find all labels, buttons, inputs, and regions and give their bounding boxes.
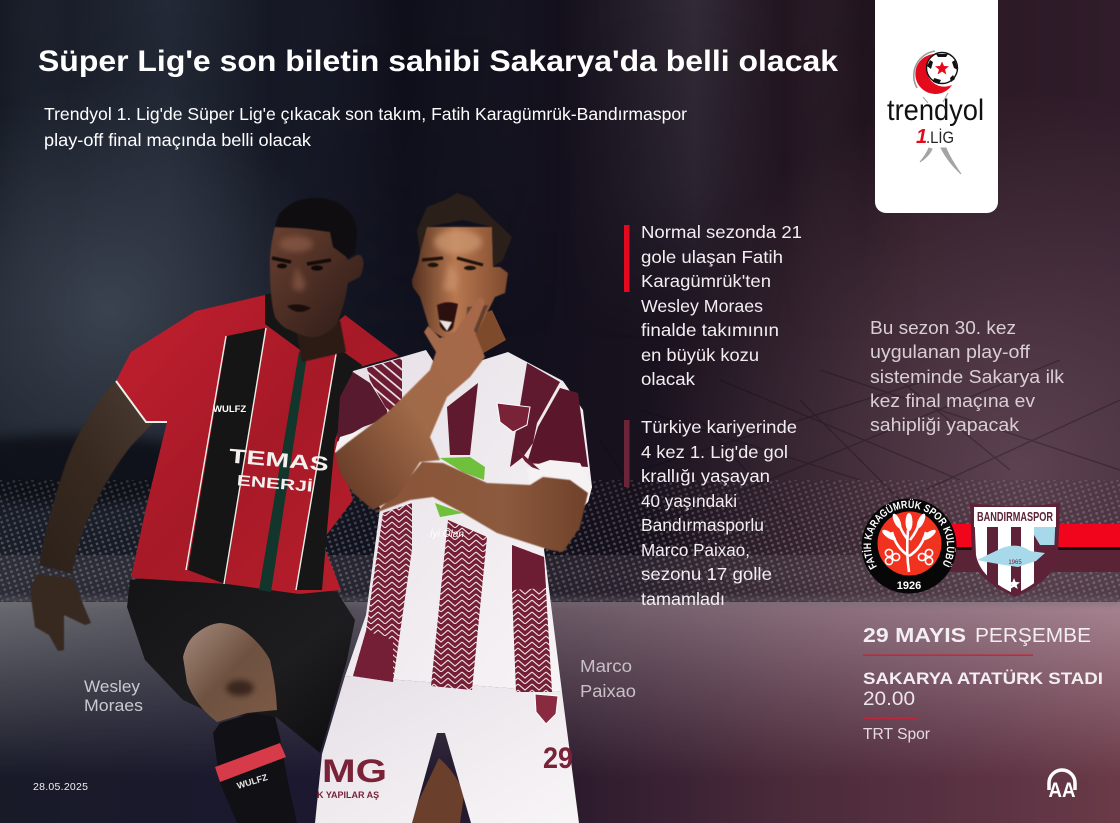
icon: AA logo: AA <box>1048 779 1076 802</box>
callout: Wesley Moraes: Normal sezonda 21 <box>641 222 802 242</box>
white shorts: 29 <box>543 742 573 775</box>
jersey crest <box>497 403 530 432</box>
head <box>270 198 364 362</box>
intro text: Trendyol 1. Lig'de Süper Lig'e çıkacak son takım, Fatih Karagümrük-Bandırmaspor <box>44 104 687 124</box>
callout: Marco Paixao <box>624 417 797 609</box>
red and black jersey: TEMAS <box>228 445 330 476</box>
wordmark: 1. Lig: .LİG <box>926 128 954 147</box>
callout: Marco Paixao: 40 yaşındaki <box>641 491 737 511</box>
match details <box>863 625 1103 743</box>
callout: Marco Paixao: Marco Paixao, <box>641 540 750 560</box>
icon: crescent and football <box>914 51 958 94</box>
jersey text: WULFZ <box>213 404 246 415</box>
black sock with red band <box>213 713 297 823</box>
kick-off time: 20.00 <box>863 689 915 710</box>
player name: Wesley Moraes <box>84 677 143 715</box>
intro text <box>44 104 687 150</box>
title: Süper Lig'e son biletin sahibi Sakarya'da belli olacak <box>38 45 838 78</box>
head <box>412 193 512 337</box>
logo: Bandırmaspor: BANDIRMASPOR <box>977 510 1053 524</box>
callout: Marco Paixao: Bandırmasporlu <box>641 515 764 535</box>
intro text: play-off final maçında belli olacak <box>44 130 311 150</box>
callout: Wesley Moraes: gole ulaşan Fatih <box>641 247 783 267</box>
match ribbon: red and maroon bars <box>945 524 1120 572</box>
text: play-off note <box>870 318 1065 435</box>
date: 29 MAYIS <box>863 625 966 647</box>
callout: Wesley Moraes: Wesley Moraes <box>641 296 763 316</box>
sponsor badge <box>435 457 485 517</box>
maroon and white jersey <box>335 350 592 692</box>
white shorts: K YAPILAR AŞ <box>317 790 379 800</box>
text: play-off note: Bu sezon 30. kez <box>870 318 1016 338</box>
black shorts <box>127 573 355 753</box>
text: play-off note: kez final maçına ev <box>870 391 1035 411</box>
logo: Fatih Karagümrük: 1926 <box>897 580 921 592</box>
red and black jersey <box>116 293 399 594</box>
icon: AA logo <box>1048 770 1076 802</box>
venue: SAKARYA ATATÜRK STADI <box>863 669 1103 688</box>
logo card: Trendyol 1. Lig <box>875 0 998 213</box>
logo: Bandırmaspor: 1965 <box>1008 560 1022 566</box>
white shorts: MG <box>322 753 387 789</box>
wordmark: 1. Lig <box>916 126 954 148</box>
wordmark: trendyol: trendyol <box>887 94 984 127</box>
broadcaster: TRT Spor <box>863 726 930 743</box>
callout: Marco Paixao: 4 kez 1. Lig'de gol <box>641 442 788 462</box>
leg, knee <box>183 623 277 722</box>
callout: Wesley Moraes: Karagümrük'ten <box>641 271 771 291</box>
wordmark: 1. Lig: 1 <box>916 126 927 148</box>
player: Marco Paixao <box>315 193 592 823</box>
callout: Marco Paixao: Türkiye kariyerinde <box>641 417 797 437</box>
black sock with red band: WULFZ <box>236 772 269 791</box>
player: Wesley Moraes <box>30 198 399 823</box>
neck <box>444 310 506 358</box>
text: play-off note: sahipliği yapacak <box>870 415 1020 435</box>
logo: Fatih Karagümrük: FATİH KARAGÜMRÜK SPOR KULÜBÜ <box>862 498 956 570</box>
crossed arms <box>335 298 588 552</box>
maroon and white jersey: İyi Olan <box>430 528 464 540</box>
callout: Marco Paixao: tamamladı <box>641 589 725 609</box>
date <box>863 625 1091 647</box>
player name: Marco Paixao: Paixao <box>580 681 636 701</box>
callout: Marco Paixao: krallığı yaşayan <box>641 466 770 486</box>
left forearm and hand <box>30 381 154 651</box>
player name: Marco Paixao <box>580 656 636 701</box>
text: play-off note: uygulanan play-off <box>870 342 1031 362</box>
callout: Wesley Moraes: finalde takımının <box>641 320 779 340</box>
callout: Wesley Moraes <box>624 222 802 389</box>
player name: Marco Paixao: Marco <box>580 656 632 676</box>
date: PERŞEMBE <box>975 625 1091 647</box>
publication date: 28.05.2025 <box>33 781 88 793</box>
white shorts <box>315 676 579 823</box>
logo: Bandırmaspor <box>970 503 1060 597</box>
callout: Wesley Moraes: olacak <box>641 369 695 389</box>
player name: Wesley Moraes: Moraes <box>84 696 143 715</box>
player name: Wesley Moraes: Wesley <box>84 677 140 696</box>
red and black jersey: ENERJİ <box>236 472 313 496</box>
icon: grey swooshes <box>920 93 961 174</box>
callout: Marco Paixao: sezonu 17 golle <box>641 564 772 584</box>
text: play-off note: sisteminde Sakarya ilk <box>870 367 1065 387</box>
knee shadow <box>226 680 254 696</box>
callout: Wesley Moraes: en büyük kozu <box>641 345 759 365</box>
